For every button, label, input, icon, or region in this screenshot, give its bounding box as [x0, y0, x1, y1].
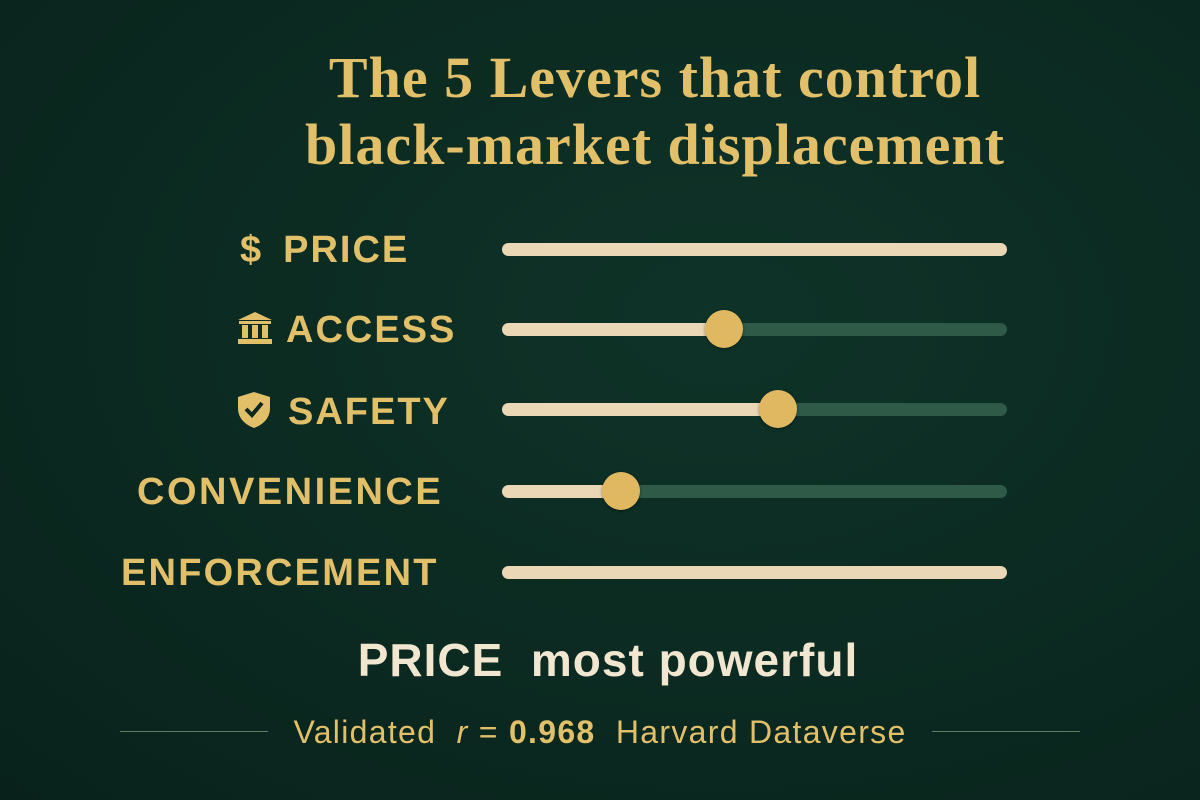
label: price: $ PRICE: [240, 229, 409, 271]
slider: price: [502, 243, 1007, 256]
footer: Validated r = 0.968 Harvard Dataverse: [293, 714, 907, 750]
label: safety: SAFETY: [288, 391, 450, 433]
slider: enforcement: [502, 566, 1007, 579]
conclusion text: PRICE most powerful: [358, 634, 858, 686]
label: enforcement: ENFORCEMENT: [121, 552, 439, 594]
label: access: ACCESS: [286, 309, 456, 351]
slider: access: [502, 323, 1007, 336]
slider: convenience: [502, 485, 1007, 498]
label: convenience: CONVENIENCE: [137, 471, 443, 513]
title: The 5 Levers that control: [329, 45, 981, 110]
title: [305, 45, 1005, 177]
title: black-market displacement: [305, 112, 1005, 177]
slider: safety: [502, 403, 1007, 416]
